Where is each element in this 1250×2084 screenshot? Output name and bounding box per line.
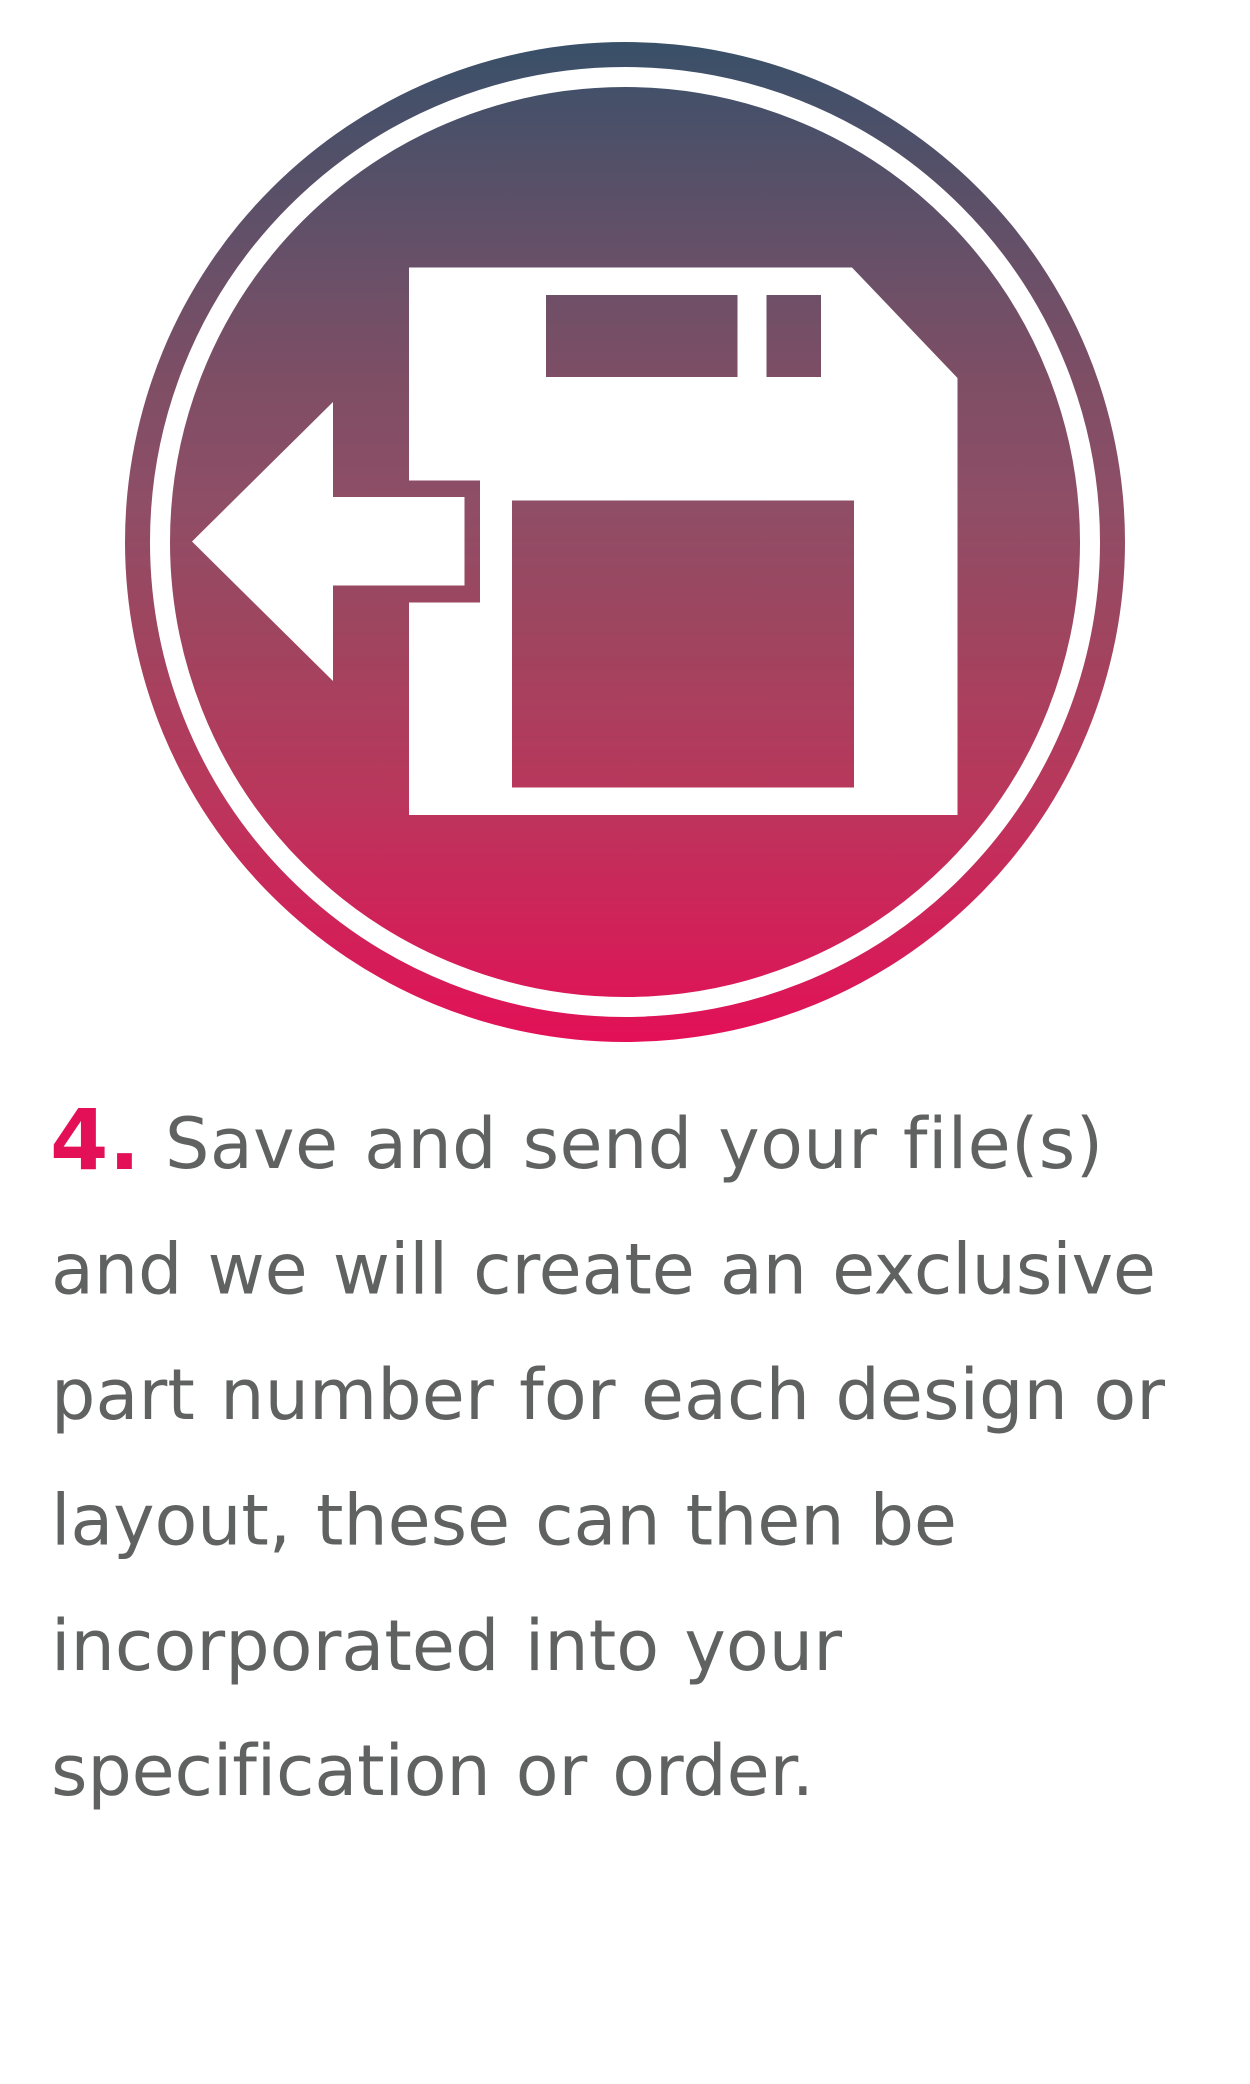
icon: save file with arrow in gradient circle (125, 42, 1125, 1042)
icon: floppy disk (409, 268, 958, 815)
white ring (160, 77, 1090, 1007)
text block: step description (50, 1091, 1165, 1812)
line 2: and we will create an exclusive (51, 1228, 1156, 1310)
outer gradient ring (125, 42, 1125, 1042)
icon: left arrow (192, 402, 464, 681)
line 4: layout, these can then be (51, 1480, 957, 1562)
step number: 4. (50, 1091, 140, 1189)
line 6: specification or order. (51, 1730, 814, 1812)
line 1: Save and send your file(s) (165, 1103, 1103, 1185)
line 5: incorporated into your (51, 1605, 842, 1687)
line 3: part number for each design or (51, 1354, 1165, 1436)
